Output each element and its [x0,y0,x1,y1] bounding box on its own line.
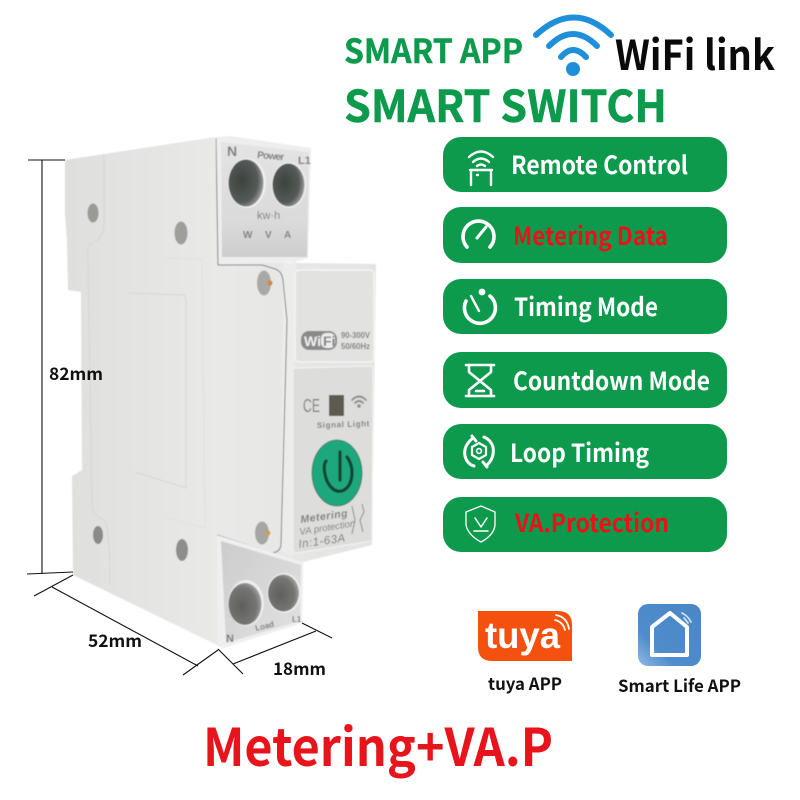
feature: Remote Control [443,137,727,192]
bottom heading: Metering+VA.P [203,706,553,781]
upper terminal labels: A [284,230,291,241]
tuya wifi arcs [555,615,569,630]
logo: tuya: tuya [485,615,560,656]
label: 18mm: 18mm [273,655,326,680]
wiring diagram [352,504,364,534]
lower terminal labels: Load [254,620,275,633]
logo: tuya [478,611,572,661]
upper terminal block [216,136,311,264]
icon: shield [466,506,495,542]
label: tuya APP: tuya APP [488,670,562,695]
power button [312,440,362,506]
signal light window [329,395,344,416]
feature: Countdown Mode [443,352,727,408]
feature: Metering Data [443,207,727,263]
voltage label: 50/60Hz [341,341,370,351]
label: 82mm: 82mm [49,360,103,385]
title: SMART SWITCH: SMART SWITCH [344,71,667,135]
mounting screw holes [88,204,273,561]
upper terminal labels: kw·h [257,210,280,222]
upper terminal labels: Power [257,150,285,163]
CE mark: CE [303,396,320,416]
icon: wifi [536,18,611,76]
lower terminal holes [228,573,301,626]
voltage label: 90-300V [341,330,370,340]
icon: remote control [469,152,493,185]
dimension lines [27,160,332,675]
lower terminal labels: L1 [292,615,302,624]
rating label [298,507,356,551]
feature: Metering Data: Metering Data [513,217,668,253]
feature: Remote Control: Remote Control [511,146,688,182]
label: 52mm: 52mm [88,627,142,652]
front cover upper panel [295,270,374,362]
upper terminal labels: V [265,230,272,241]
lower terminal block [217,535,303,648]
upper terminal labels [227,143,311,241]
wifi badge [301,331,337,350]
feature: Countdown Mode: Countdown Mode [513,362,710,398]
logo: Smart Life [638,604,701,666]
device side body [65,137,376,648]
rating label: Metering [300,507,349,526]
lower terminal labels [226,615,302,645]
side moulding lines [88,155,205,585]
feature: Loop Timing: Loop Timing [510,434,649,470]
product photo: smart switch device [65,136,376,648]
upper terminal labels: L1 [298,155,311,167]
feature: Timing Mode: Timing Mode [514,288,658,324]
upper terminal holes [228,158,306,208]
feature: Timing Mode [443,279,727,334]
icon: hourglass [466,365,494,396]
feature: Loop Timing [443,424,727,479]
front block side face [281,262,296,556]
feature: VA.Protection [443,497,727,552]
icon: gauge [463,221,494,247]
label: Smart Life APP: Smart Life APP [618,672,741,697]
wifi mark on device [352,396,366,407]
title: WiFi link: WiFi link [615,22,775,82]
front cover lower panel [293,366,373,553]
signal light label: Signal Light [317,419,370,430]
upper terminal labels: N [227,143,237,159]
upper terminal labels: W [243,230,253,241]
wifi badge: Wi [304,333,321,349]
lower terminal labels: N [226,633,234,645]
title line: SMART APP: SMART APP [344,25,523,73]
rating label: In:1-63A [298,532,346,551]
icon: loop [465,436,493,467]
front seam line [216,138,287,553]
rating label: VA protection [299,518,356,538]
feature: VA.Protection: VA.Protection [514,504,669,540]
voltage label [341,330,370,351]
icon: timer [464,289,495,323]
wifi badge: Fi [323,333,335,349]
